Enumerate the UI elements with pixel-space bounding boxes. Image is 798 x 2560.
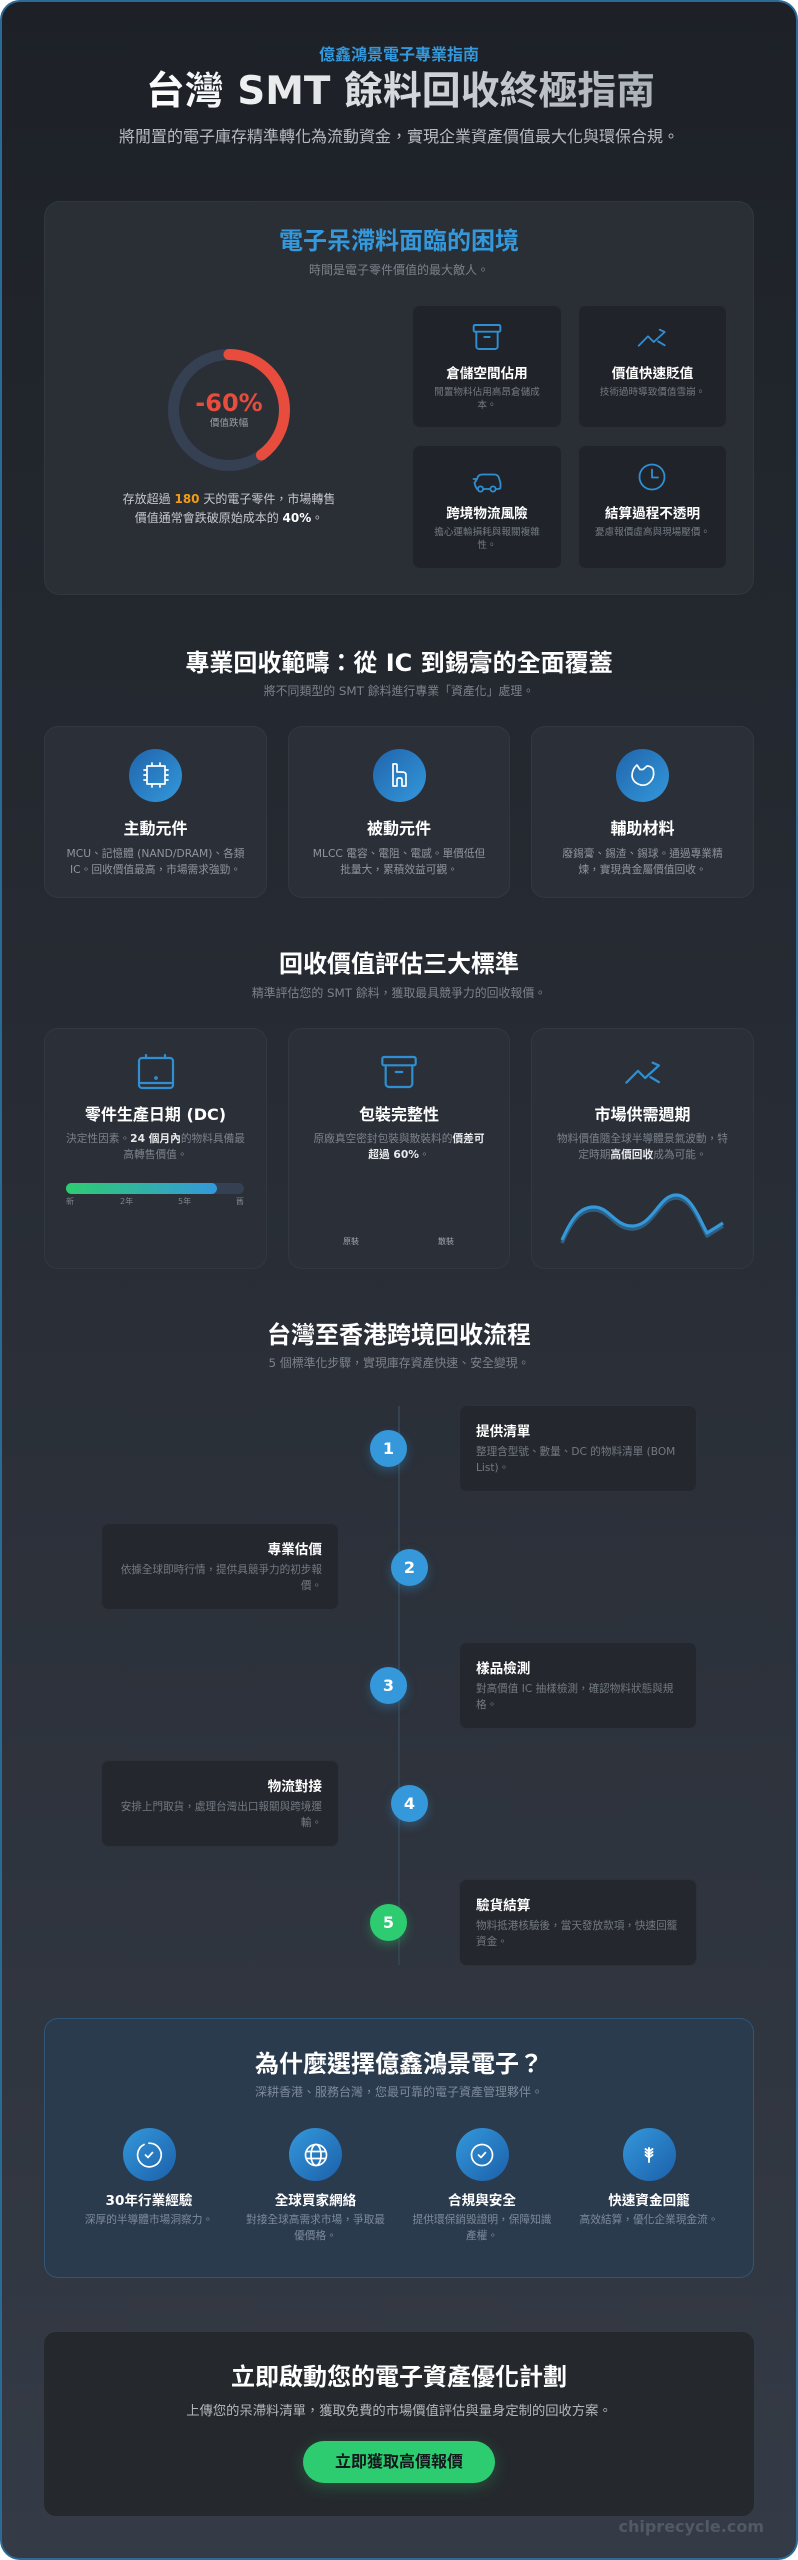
card: depreciation <box>578 305 727 428</box>
step 2 marker <box>391 1548 428 1586</box>
card: auxiliary materials <box>531 726 754 898</box>
step text <box>121 1564 322 1592</box>
card text: 擔心運輸損耗與報關複雜 <box>434 527 540 538</box>
step 5 marker: 5 <box>383 1912 394 1932</box>
step text: 安排上門取貨，處理台灣出口報關與跨境運 <box>121 1801 322 1813</box>
card text: 原廠真空密封包裝與散裝料的價差可 <box>313 1132 485 1145</box>
feature text: 提供環保銷毀證明，保障知識 <box>413 2213 551 2226</box>
card title: 結算過程不透明 <box>605 506 700 522</box>
card: settlement <box>578 445 727 569</box>
step text: 資金。 <box>476 1936 508 1948</box>
step title: 驗貨結算 <box>476 1898 530 1914</box>
step 4 marker: 4 <box>404 1794 415 1812</box>
step text: 整理含型號、數量、DC 的物料清單 (BOM <box>476 1446 675 1458</box>
card title: 價值快速貶值 <box>612 366 693 382</box>
card text: 技術過時導致價值雪崩。 <box>600 387 705 398</box>
feature: experience <box>85 2128 213 2226</box>
card: storage <box>412 305 562 428</box>
watermark: chiprecycle.com <box>618 2517 764 2536</box>
card text <box>557 1132 728 1161</box>
card text: 定時期高價回收成為可能。 <box>578 1148 707 1161</box>
panel: call to action <box>44 2332 754 2516</box>
step 3 marker <box>370 1666 407 1704</box>
donut caption <box>123 492 335 524</box>
feature text: 對接全球高需求市場，爭取最 <box>246 2213 385 2226</box>
card text <box>562 846 723 876</box>
step 4 card <box>101 1760 339 1847</box>
card: active components <box>44 726 267 898</box>
card text: 憂慮報價虛高與現場壓價。 <box>595 527 710 538</box>
feature text: 產權。 <box>466 2229 498 2242</box>
panel subheading: 深耕香港、服務台灣，您最可靠的電子資產管理夥伴。 <box>255 2085 543 2099</box>
main title: 台灣 SMT 餘料回收終極指南 <box>146 69 655 114</box>
donut caption: 存放超過 180 天的電子零件，市場轉售 <box>123 492 335 506</box>
card text <box>434 386 540 411</box>
icon: clock <box>638 464 666 490</box>
timeline line <box>398 1406 400 1965</box>
step text: List)。 <box>476 1462 509 1474</box>
donut label: 價值跌幅 <box>210 418 248 429</box>
card title: 輔助材料 <box>610 819 674 838</box>
card text: 閒置物料佔用高昂倉儲成 <box>434 387 540 398</box>
feature text: 深厚的半導體市場洞察力。 <box>85 2213 213 2226</box>
icon: check circle <box>456 2128 508 2181</box>
panel: why choose us <box>44 2018 754 2278</box>
card text: IC。回收價值最高，市場需求強勁。 <box>70 862 241 876</box>
card: date code <box>44 1028 267 1269</box>
card: market cycle <box>531 1028 754 1269</box>
icon: tulip <box>616 748 669 802</box>
step title: 提供清單 <box>476 1424 530 1440</box>
icon: wheat <box>622 2128 676 2181</box>
step 1 card <box>459 1405 697 1492</box>
icon: archive box <box>381 1056 417 1088</box>
label: loose: 散裝 <box>438 1237 454 1246</box>
step text: 輸。 <box>301 1817 322 1829</box>
heading: criteria: 回收價值評估三大標準 <box>279 950 519 978</box>
step text <box>476 1920 677 1948</box>
card title: 跨境物流風險 <box>446 506 528 522</box>
cta text: 上傳您的呆滯料清單，獲取免費的市場價值評估與量身定制的回收方案。 <box>186 2404 612 2419</box>
feature text: 優價格。 <box>294 2229 337 2242</box>
cta button: 立即獲取高價報價 <box>335 2452 463 2471</box>
card title: 倉儲空間佔用 <box>446 366 528 382</box>
card text: 高轉售價值。 <box>123 1148 188 1161</box>
bar fill <box>66 1183 217 1194</box>
step text: 格。 <box>476 1699 497 1711</box>
step title: 專業估價 <box>268 1542 322 1558</box>
feature title: 快速資金回籠 <box>608 2193 690 2209</box>
card text <box>313 846 485 876</box>
panel heading: 為什麼選擇億鑫鴻景電子？ <box>255 2050 543 2078</box>
feature: fast cash <box>580 2128 718 2226</box>
card text <box>434 526 540 551</box>
feature text: 高效結算，優化企業現金流。 <box>580 2213 718 2226</box>
step 1 marker <box>370 1430 407 1466</box>
donut value: -60% <box>195 389 263 417</box>
bar scale: 2年 <box>120 1197 133 1206</box>
card title: 市場供需週期 <box>594 1105 690 1124</box>
panel subheading: 時間是電子零件價值的最大敵人。 <box>309 263 489 277</box>
feature: compliance <box>412 2128 551 2242</box>
timeline <box>102 1406 696 1965</box>
icon: chip <box>129 748 182 802</box>
step title: 物流對接 <box>268 1779 322 1795</box>
subtitle: 將閒置的電子庫存精準轉化為流動資金，實現企業資產價值最大化與環保合規。 <box>119 127 679 146</box>
feature title: 全球買家網絡 <box>275 2193 356 2209</box>
label: original: 原裝 <box>343 1237 359 1246</box>
step text: 價。 <box>301 1580 322 1592</box>
bar scale: 舊 <box>236 1197 244 1206</box>
donut chart <box>168 349 290 471</box>
bar scale: 新 <box>66 1197 74 1206</box>
card text: 超過 60%。 <box>368 1148 430 1161</box>
card text: MCU、記憶體 (NAND/DRAM)、各類 <box>67 846 244 860</box>
card text <box>66 1132 245 1161</box>
icon: trend <box>625 1062 660 1084</box>
card title: 包裝完整性 <box>359 1105 439 1124</box>
step text: 物料抵港核驗後，當天發放款項，快速回籠 <box>476 1920 677 1932</box>
step 1 marker: 1 <box>383 1438 394 1458</box>
step 2 marker: 2 <box>404 1558 415 1576</box>
panel: dilemma <box>44 201 754 595</box>
progress bar <box>66 1183 244 1194</box>
card text: 批量大，累積效益可觀。 <box>340 862 458 876</box>
icon: trend <box>638 328 666 347</box>
step 2 card <box>101 1523 339 1610</box>
card title: 主動元件 <box>123 819 188 838</box>
step 4 marker <box>391 1784 428 1822</box>
cta heading: 立即啟動您的電子資產優化計劃 <box>231 2363 567 2391</box>
subheading: scope: 將不同類型的 SMT 餘料進行專業「資產化」處理。 <box>264 684 534 698</box>
icon: globe <box>289 2128 342 2181</box>
card text: 煉，實現貴金屬價值回收。 <box>578 862 707 876</box>
step text: 依據全球即時行情，提供具競爭力的初步報 <box>121 1564 322 1576</box>
step title: 樣品檢測 <box>476 1661 530 1677</box>
bar scale: 5年 <box>178 1197 191 1206</box>
step 5 marker <box>370 1904 407 1940</box>
header <box>119 45 679 146</box>
card text <box>313 1132 485 1161</box>
icon: passive <box>373 748 426 802</box>
card text: 物料價值隨全球半導體景氣波動，特 <box>557 1132 728 1145</box>
heading: scope: 專業回收範疇：從 IC 到錫膏的全面覆蓋 <box>185 649 613 677</box>
feature text <box>246 2213 385 2242</box>
feature text <box>412 2213 551 2242</box>
eyebrow: 億鑫鴻景電子專業指南 <box>319 45 479 64</box>
card: passive components <box>288 726 510 898</box>
icon: archive box <box>472 324 502 350</box>
subheading: process: 5 個標準化步驟，實現庫存資產快速、安全變現。 <box>268 1356 530 1370</box>
icon: van <box>472 474 502 492</box>
step text <box>476 1446 675 1474</box>
card text <box>67 846 244 876</box>
step 5 card <box>459 1879 697 1966</box>
bar scale <box>66 1197 244 1206</box>
step text: 對高價值 IC 抽樣檢測，確認物料狀態與規 <box>476 1683 673 1695</box>
card text: 性。 <box>477 540 497 551</box>
step text <box>121 1800 322 1829</box>
card: logistics <box>412 445 562 569</box>
panel heading: 電子呆滯料面臨的困境 <box>279 227 519 255</box>
subheading: criteria: 精準評估您的 SMT 餘料，獲取最具競爭力的回收報價。 <box>252 986 546 1000</box>
feature title: 30年行業經驗 <box>106 2193 192 2209</box>
step 3 card <box>459 1642 697 1729</box>
icon: calendar <box>138 1054 174 1090</box>
card text: 廢錫膏、錫渣、錫球。通過專業精 <box>562 846 723 860</box>
card title: 被動元件 <box>367 819 431 838</box>
donut caption: 價值通常會跌破原始成本的 40%。 <box>135 510 323 524</box>
icon: progress check <box>122 2128 176 2181</box>
card text: 決定性因素。24 個月內的物料具備最 <box>66 1132 245 1145</box>
step text <box>476 1682 673 1711</box>
card title: 零件生產日期 (DC) <box>85 1105 226 1124</box>
feature title: 合規與安全 <box>448 2193 516 2209</box>
card text: MLCC 電容、電阻、電感。單價低但 <box>313 846 485 860</box>
card: packaging <box>288 1028 510 1269</box>
feature: global network <box>246 2128 385 2242</box>
step 3 marker: 3 <box>383 1676 394 1694</box>
cta button <box>303 2441 495 2483</box>
line chart <box>560 1193 724 1244</box>
card text: 本。 <box>477 400 497 411</box>
heading: process: 台灣至香港跨境回收流程 <box>267 1321 531 1349</box>
